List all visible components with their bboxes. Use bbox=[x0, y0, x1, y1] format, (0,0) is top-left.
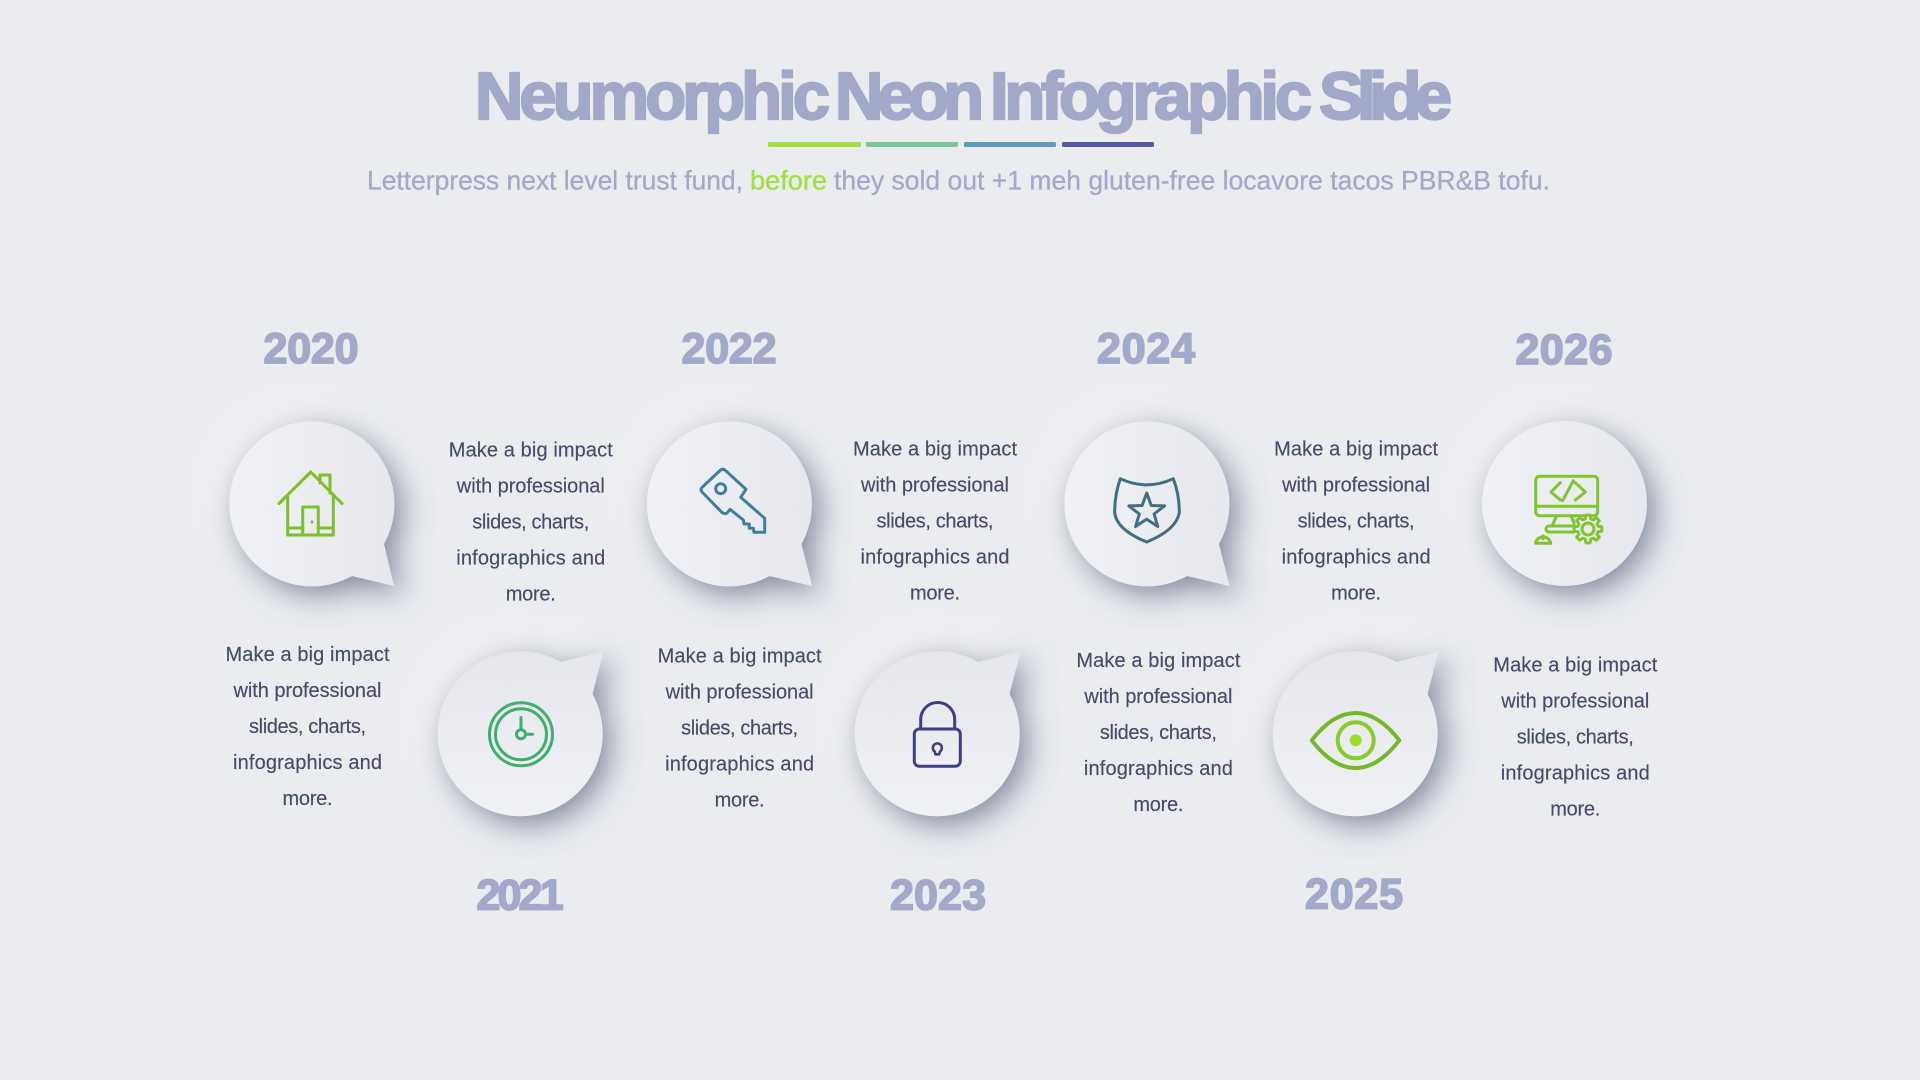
text block 2021: infographics and bbox=[456, 548, 605, 570]
circle 2026 bbox=[1482, 421, 1647, 586]
year 2026: 2026 bbox=[1516, 326, 1612, 374]
text block 2025: Make a big impact bbox=[1274, 438, 1439, 460]
text block 2026: more. bbox=[1550, 798, 1600, 820]
text block 2020: more. bbox=[282, 788, 332, 810]
text block 2022: Make a big impact bbox=[658, 646, 822, 668]
text block 2024: infographics and bbox=[1084, 758, 1233, 780]
text block 2021 bbox=[449, 440, 613, 606]
text block 2022: more. bbox=[715, 790, 765, 812]
title: Neon bbox=[835, 59, 984, 134]
icon: shield with star bbox=[1115, 479, 1179, 542]
year 2021: 2021 bbox=[476, 872, 564, 920]
title: Infographic bbox=[990, 59, 1312, 134]
text block 2023 bbox=[853, 438, 1017, 604]
text block 2024: slides, charts, bbox=[1100, 722, 1217, 744]
text block 2020: slides, charts, bbox=[249, 716, 366, 738]
year 2022: 2022 bbox=[682, 325, 776, 373]
text block 2026 bbox=[1493, 654, 1658, 820]
icon: eye bbox=[1312, 713, 1399, 768]
text block 2020 bbox=[226, 644, 390, 810]
text block 2024: Make a big impact bbox=[1076, 650, 1241, 672]
subtitle bbox=[367, 166, 1550, 196]
year 2024: 2024 bbox=[1097, 325, 1195, 373]
speech bubble 2025 bbox=[1273, 651, 1438, 816]
text block 2021: slides, charts, bbox=[472, 512, 589, 534]
text block 2021: more. bbox=[506, 584, 556, 606]
icon: house bbox=[279, 472, 342, 535]
icon: clock bbox=[490, 703, 552, 766]
text block 2023: slides, charts, bbox=[876, 510, 994, 532]
text block 2026: with professional bbox=[1500, 690, 1649, 712]
text block 2022: infographics and bbox=[665, 754, 814, 776]
text block 2024: more. bbox=[1133, 794, 1183, 816]
text block 2022 bbox=[658, 646, 822, 812]
subtitle: Letterpress next level trust fund, bbox=[367, 166, 743, 196]
year 2020: 2020 bbox=[264, 325, 358, 373]
text block 2025 bbox=[1274, 438, 1439, 604]
text block 2020: Make a big impact bbox=[226, 644, 390, 666]
text block 2022: with professional bbox=[665, 682, 814, 704]
year 2023: 2023 bbox=[890, 872, 986, 920]
text block 2021: Make a big impact bbox=[449, 440, 613, 462]
speech bubble 2021 bbox=[438, 651, 604, 816]
speech bubble 2022 bbox=[647, 421, 812, 586]
title underline colour bars bbox=[768, 142, 1154, 147]
text block 2020: infographics and bbox=[233, 752, 382, 774]
text block 2025: infographics and bbox=[1282, 546, 1431, 568]
speech bubble 2023 bbox=[855, 651, 1020, 816]
text block 2020: with professional bbox=[232, 680, 382, 702]
text block 2024: with professional bbox=[1083, 686, 1232, 708]
text block 2026: infographics and bbox=[1501, 762, 1650, 784]
text block 2023: with professional bbox=[860, 474, 1009, 496]
year 2025: 2025 bbox=[1305, 870, 1403, 918]
speech bubble 2024 bbox=[1064, 421, 1230, 586]
text block 2022: slides, charts, bbox=[681, 718, 798, 740]
text block 2023: more. bbox=[910, 582, 960, 604]
text block 2024 bbox=[1076, 650, 1241, 816]
subtitle: before bbox=[750, 166, 827, 196]
text block 2021: with professional bbox=[456, 476, 605, 498]
text block 2025: more. bbox=[1331, 582, 1381, 604]
text block 2026: slides, charts, bbox=[1517, 726, 1634, 748]
title: Slide bbox=[1319, 59, 1452, 134]
title: Neumorphic bbox=[475, 59, 830, 134]
text block 2023: Make a big impact bbox=[853, 438, 1017, 460]
text block 2026: Make a big impact bbox=[1493, 654, 1658, 676]
icon: key bbox=[701, 469, 765, 532]
text block 2025: slides, charts, bbox=[1298, 510, 1415, 532]
speech bubble 2020 bbox=[229, 421, 394, 586]
text block 2023: infographics and bbox=[860, 546, 1010, 568]
icon: padlock bbox=[914, 702, 960, 766]
title bbox=[475, 59, 1452, 134]
text block 2025: with professional bbox=[1281, 474, 1430, 496]
subtitle: they sold out +1 meh gluten-free locavore tacos PBR&B tofu. bbox=[834, 166, 1550, 196]
icon: monitor with code and gear bbox=[1536, 476, 1602, 543]
